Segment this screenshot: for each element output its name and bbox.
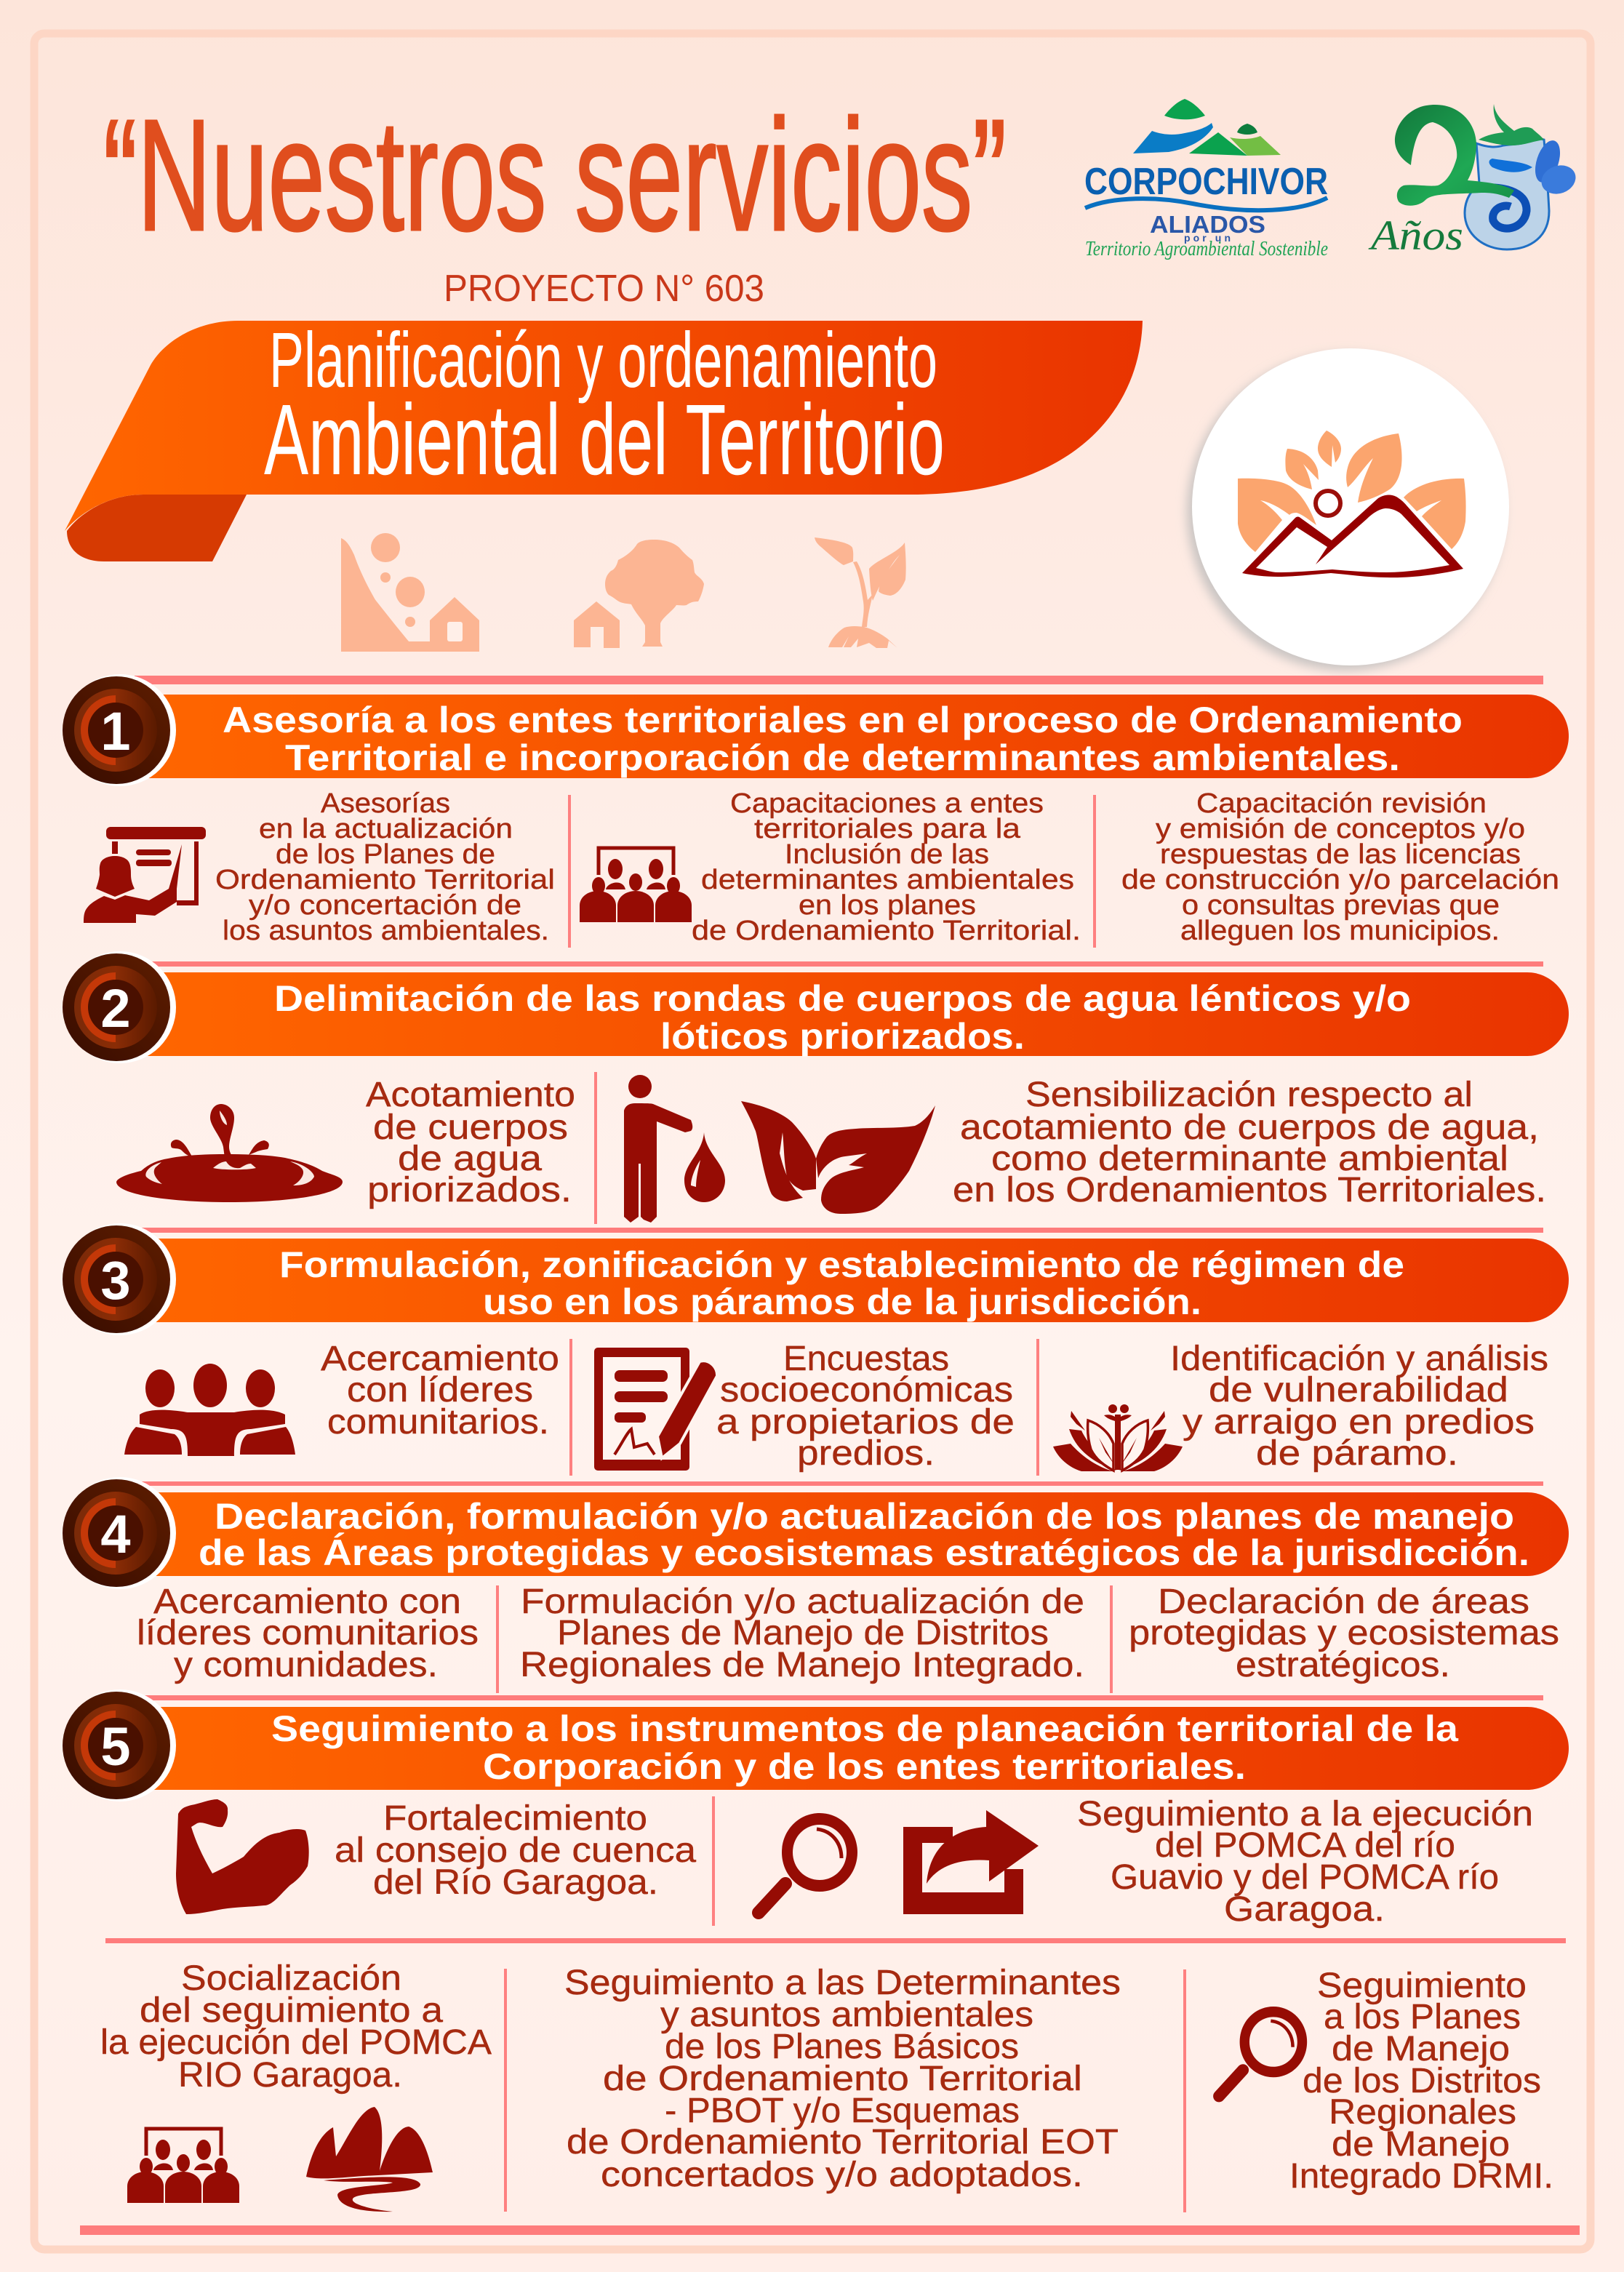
header band: Seguimiento a los instrumentos de planeación territorial de la	[271, 1708, 1459, 1749]
banner ribbon	[65, 316, 1143, 561]
logo: Corpochivor: ALIADOS	[1150, 211, 1265, 238]
text: capacitaciones: en los planes	[799, 890, 976, 921]
panel: section 4	[63, 1477, 1569, 1693]
header band	[138, 972, 1569, 1057]
icon: water puddle	[116, 1104, 343, 1202]
logo: Corpochivor: por un	[1184, 232, 1231, 244]
number badge 1: 1	[100, 701, 131, 761]
icon: magnifier	[759, 1813, 857, 1913]
icon: landslide	[341, 533, 479, 652]
banner heading	[264, 316, 945, 496]
text: socialización: Socialización	[181, 1959, 401, 1998]
text: distritos regionales: de Manejo	[1332, 2030, 1510, 2068]
text: encuestas: Encuestas	[783, 1340, 949, 1378]
text: asesorías: Asesorías	[321, 788, 450, 819]
header band: Asesoría a los entes territoriales en el proceso de Ordenamiento	[223, 700, 1463, 740]
text: capacitación revisión: respuestas de las licencias	[1160, 839, 1521, 870]
text: distritos regionales: a los Planes	[1324, 1998, 1521, 2036]
text: determinantes: de Ordenamiento Territorial	[603, 2060, 1082, 2098]
text: encuestas	[716, 1340, 1015, 1473]
text: acotamiento: priorizados.	[367, 1171, 572, 1209]
text: capacitaciones: territoriales para la	[754, 814, 1021, 844]
text: identificación: Identificación y análisis	[1170, 1340, 1548, 1378]
text: sensibilización: acotamiento de cuerpos de agua,	[960, 1108, 1539, 1147]
text: sensibilización: Sensibilización respecto al	[1025, 1076, 1473, 1114]
text: acotamiento: Acotamiento	[366, 1076, 575, 1114]
text: distritos regionales: Integrado DRMI.	[1289, 2157, 1553, 2196]
text: encuestas: socioeconómicas	[720, 1371, 1013, 1409]
text: encuestas: a propietarios de	[716, 1403, 1015, 1441]
icon: leaves	[741, 1101, 935, 1214]
text: capacitaciones: Capacitaciones a entes	[730, 788, 1044, 819]
panel: section 3	[63, 1223, 1569, 1476]
icon: lotus	[1053, 1404, 1183, 1471]
text: seguimiento POMCA: Garagoa.	[1224, 1890, 1385, 1929]
text: declaración de áreas: protegidas y ecosistemas	[1129, 1614, 1559, 1652]
logo: Corpochivor: CORPOCHIVOR	[1084, 161, 1328, 203]
icon: share arrow	[903, 1810, 1039, 1914]
text: identificación: de vulnerabilidad	[1209, 1371, 1508, 1409]
text: seguimiento POMCA: Guavio y del POMCA río	[1111, 1858, 1499, 1897]
number badge 3: 3	[100, 1250, 131, 1311]
header band	[138, 695, 1569, 778]
text: distritos regionales: de los Distritos	[1303, 2062, 1541, 2100]
text: asesorías: de los Planes de	[276, 839, 495, 870]
title: “Nuestros servicios”	[103, 87, 1007, 264]
text: acercamiento con líderes	[137, 1583, 479, 1684]
text: declaración de áreas	[1129, 1583, 1559, 1684]
header band: Formulación, zonificación y establecimiento de régimen de	[279, 1244, 1404, 1285]
text: capacitación revisión: o consultas previas que	[1182, 890, 1500, 921]
header band	[138, 1707, 1569, 1790]
banner heading: Planificación y ordenamiento	[269, 316, 937, 404]
number badge 5	[63, 1689, 176, 1801]
text: determinantes: - PBOT y/o Esquemas	[665, 2092, 1020, 2130]
divider line	[135, 676, 1543, 684]
panel: section 5	[63, 1689, 1569, 2212]
text: socialización: del seguimiento a	[140, 1991, 443, 2030]
number badge 4: 4	[100, 1504, 131, 1564]
icon: audience	[127, 2129, 239, 2203]
text: sensibilización: en los Ordenamientos Territoriales.	[953, 1171, 1546, 1209]
text: seguimiento POMCA	[1077, 1795, 1533, 1929]
icon: tree and house	[574, 540, 704, 648]
text: formulación planes: Planes de Manejo de Distritos	[557, 1614, 1049, 1652]
text: acercamiento con líderes: y comunidades.	[174, 1646, 438, 1684]
number badge 1	[63, 674, 176, 786]
text: fortalecimiento	[335, 1799, 696, 1902]
header band	[138, 1239, 1569, 1322]
text: acercamiento con líderes: Acercamiento con	[153, 1583, 461, 1621]
text: acercamiento con líderes: líderes comunitarios	[137, 1614, 479, 1652]
text: capacitación revisión	[1121, 788, 1559, 946]
text: capacitación revisión: alleguen los municipios.	[1180, 916, 1500, 946]
text: sensibilización	[953, 1076, 1546, 1209]
text: socialización: la ejecución del POMCA	[100, 2023, 492, 2062]
text: seguimiento POMCA: Seguimiento a la ejecución	[1077, 1795, 1533, 1833]
text: identificación: de páramo.	[1256, 1434, 1458, 1473]
panel: section 1	[63, 674, 1569, 948]
number badge 5: 5	[100, 1716, 131, 1777]
header band: lóticos priorizados.	[660, 1016, 1025, 1057]
header band	[138, 1492, 1569, 1576]
text: acercamiento: comunitarios.	[327, 1403, 549, 1441]
text: asesorías: los asuntos ambientales.	[223, 916, 549, 946]
text: capacitaciones: Inclusión de las	[785, 839, 989, 870]
icon: magnifier	[1219, 2007, 1307, 2096]
text: fortalecimiento: Fortalecimiento	[383, 1799, 647, 1838]
text: declaración de áreas: estratégicos.	[1236, 1646, 1450, 1684]
text: acotamiento: de agua	[398, 1140, 542, 1178]
number badge 3	[63, 1223, 176, 1335]
text: capacitación revisión: de construcción y/o parcelación	[1121, 865, 1559, 895]
header band: Corporación y de los entes territoriales.	[483, 1746, 1246, 1787]
text: socialización	[100, 1959, 492, 2095]
number badge 2: 2	[100, 978, 131, 1039]
text: distritos regionales	[1289, 1967, 1553, 2196]
icon: mountains and river	[306, 2107, 433, 2212]
banner heading: Ambiental del Territorio	[264, 384, 945, 496]
number badge 4	[63, 1477, 176, 1589]
text: fortalecimiento: del Río Garagoa.	[373, 1863, 658, 1902]
text: fortalecimiento: al consejo de cuenca	[335, 1831, 696, 1870]
icon: person with water drop	[624, 1075, 725, 1223]
panel: section 2	[63, 951, 1569, 1224]
logo: 25 años: Años	[1368, 212, 1463, 259]
text: capacitación revisión: Capacitación revisión	[1196, 788, 1487, 819]
text: determinantes: concertados y/o adoptados.	[601, 2156, 1083, 2194]
text: acercamiento: con líderes	[347, 1371, 533, 1409]
icon: flexed arm	[176, 1799, 309, 1914]
icon circle: leaves and mountains	[1187, 348, 1509, 671]
text: identificación: y arraigo en predios	[1183, 1403, 1535, 1441]
icon: survey clipboard	[594, 1348, 717, 1471]
text: formulación planes: Formulación y/o actualización de	[521, 1583, 1084, 1621]
text: determinantes: Seguimiento a las Determinantes	[564, 1964, 1121, 2002]
text: capacitaciones: determinantes ambientales	[701, 865, 1074, 895]
logo: Corpochivor: Territorio Agroambiental Sostenible	[1085, 237, 1328, 260]
text: determinantes	[564, 1964, 1121, 2194]
header band: Territorial e incorporación de determinantes ambientales.	[285, 737, 1400, 778]
text: determinantes: y asuntos ambientales	[660, 1996, 1033, 2034]
header band: uso en los páramos de la jurisdicción.	[483, 1281, 1201, 1322]
project number: PROYECTO N° 603	[444, 268, 764, 310]
text: encuestas: predios.	[797, 1434, 935, 1473]
text: acotamiento	[366, 1076, 575, 1209]
text: sensibilización: como determinante ambiental	[991, 1140, 1508, 1178]
text: distritos regionales: de Manejo	[1332, 2125, 1510, 2164]
text: determinantes: de los Planes Básicos	[665, 2028, 1019, 2066]
text: asesorías: Ordenamiento Territorial	[215, 865, 555, 895]
text: distritos regionales: Seguimiento	[1317, 1967, 1527, 2005]
icon: sprout	[815, 537, 906, 648]
text: seguimiento POMCA: del POMCA del río	[1155, 1826, 1455, 1865]
header band: Declaración, formulación y/o actualización de los planes de manejo	[215, 1496, 1514, 1537]
text: formulación planes: Regionales de Manejo Integrado.	[520, 1646, 1084, 1684]
header band: Delimitación de las rondas de cuerpos de agua lénticos y/o	[274, 978, 1411, 1019]
text: acercamiento: Acercamiento	[321, 1340, 559, 1378]
text: acercamiento	[321, 1340, 559, 1441]
text: asesorías: y/o concertación de	[249, 890, 521, 921]
text: capacitación revisión: y emisión de conceptos y/o	[1156, 814, 1525, 844]
header band: de las Áreas protegidas y ecosistemas estratégicos de la jurisdicción.	[199, 1532, 1529, 1573]
text: socialización: RIO Garagoa.	[178, 2056, 402, 2095]
logo: 25 años	[1368, 104, 1580, 259]
icon: presenter	[84, 827, 206, 923]
text: distritos regionales: Regionales	[1329, 2093, 1516, 2132]
text: identificación	[1170, 1340, 1548, 1473]
text: capacitaciones	[692, 788, 1081, 946]
icon: audience	[580, 848, 692, 922]
logo: Corpochivor	[1084, 99, 1328, 260]
text: declaración de áreas: Declaración de áreas	[1158, 1583, 1529, 1621]
text: formulación planes	[520, 1583, 1084, 1684]
number badge 2	[63, 951, 176, 1063]
icon: community group	[124, 1364, 295, 1456]
text: determinantes: de Ordenamiento Territorial EOT	[567, 2123, 1119, 2161]
text: asesorías: en la actualización	[259, 814, 513, 844]
bottom bar	[80, 2225, 1580, 2235]
text: capacitaciones: de Ordenamiento Territorial.	[692, 916, 1081, 946]
text: asesorías	[215, 788, 555, 946]
text: acotamiento: de cuerpos	[373, 1108, 568, 1147]
